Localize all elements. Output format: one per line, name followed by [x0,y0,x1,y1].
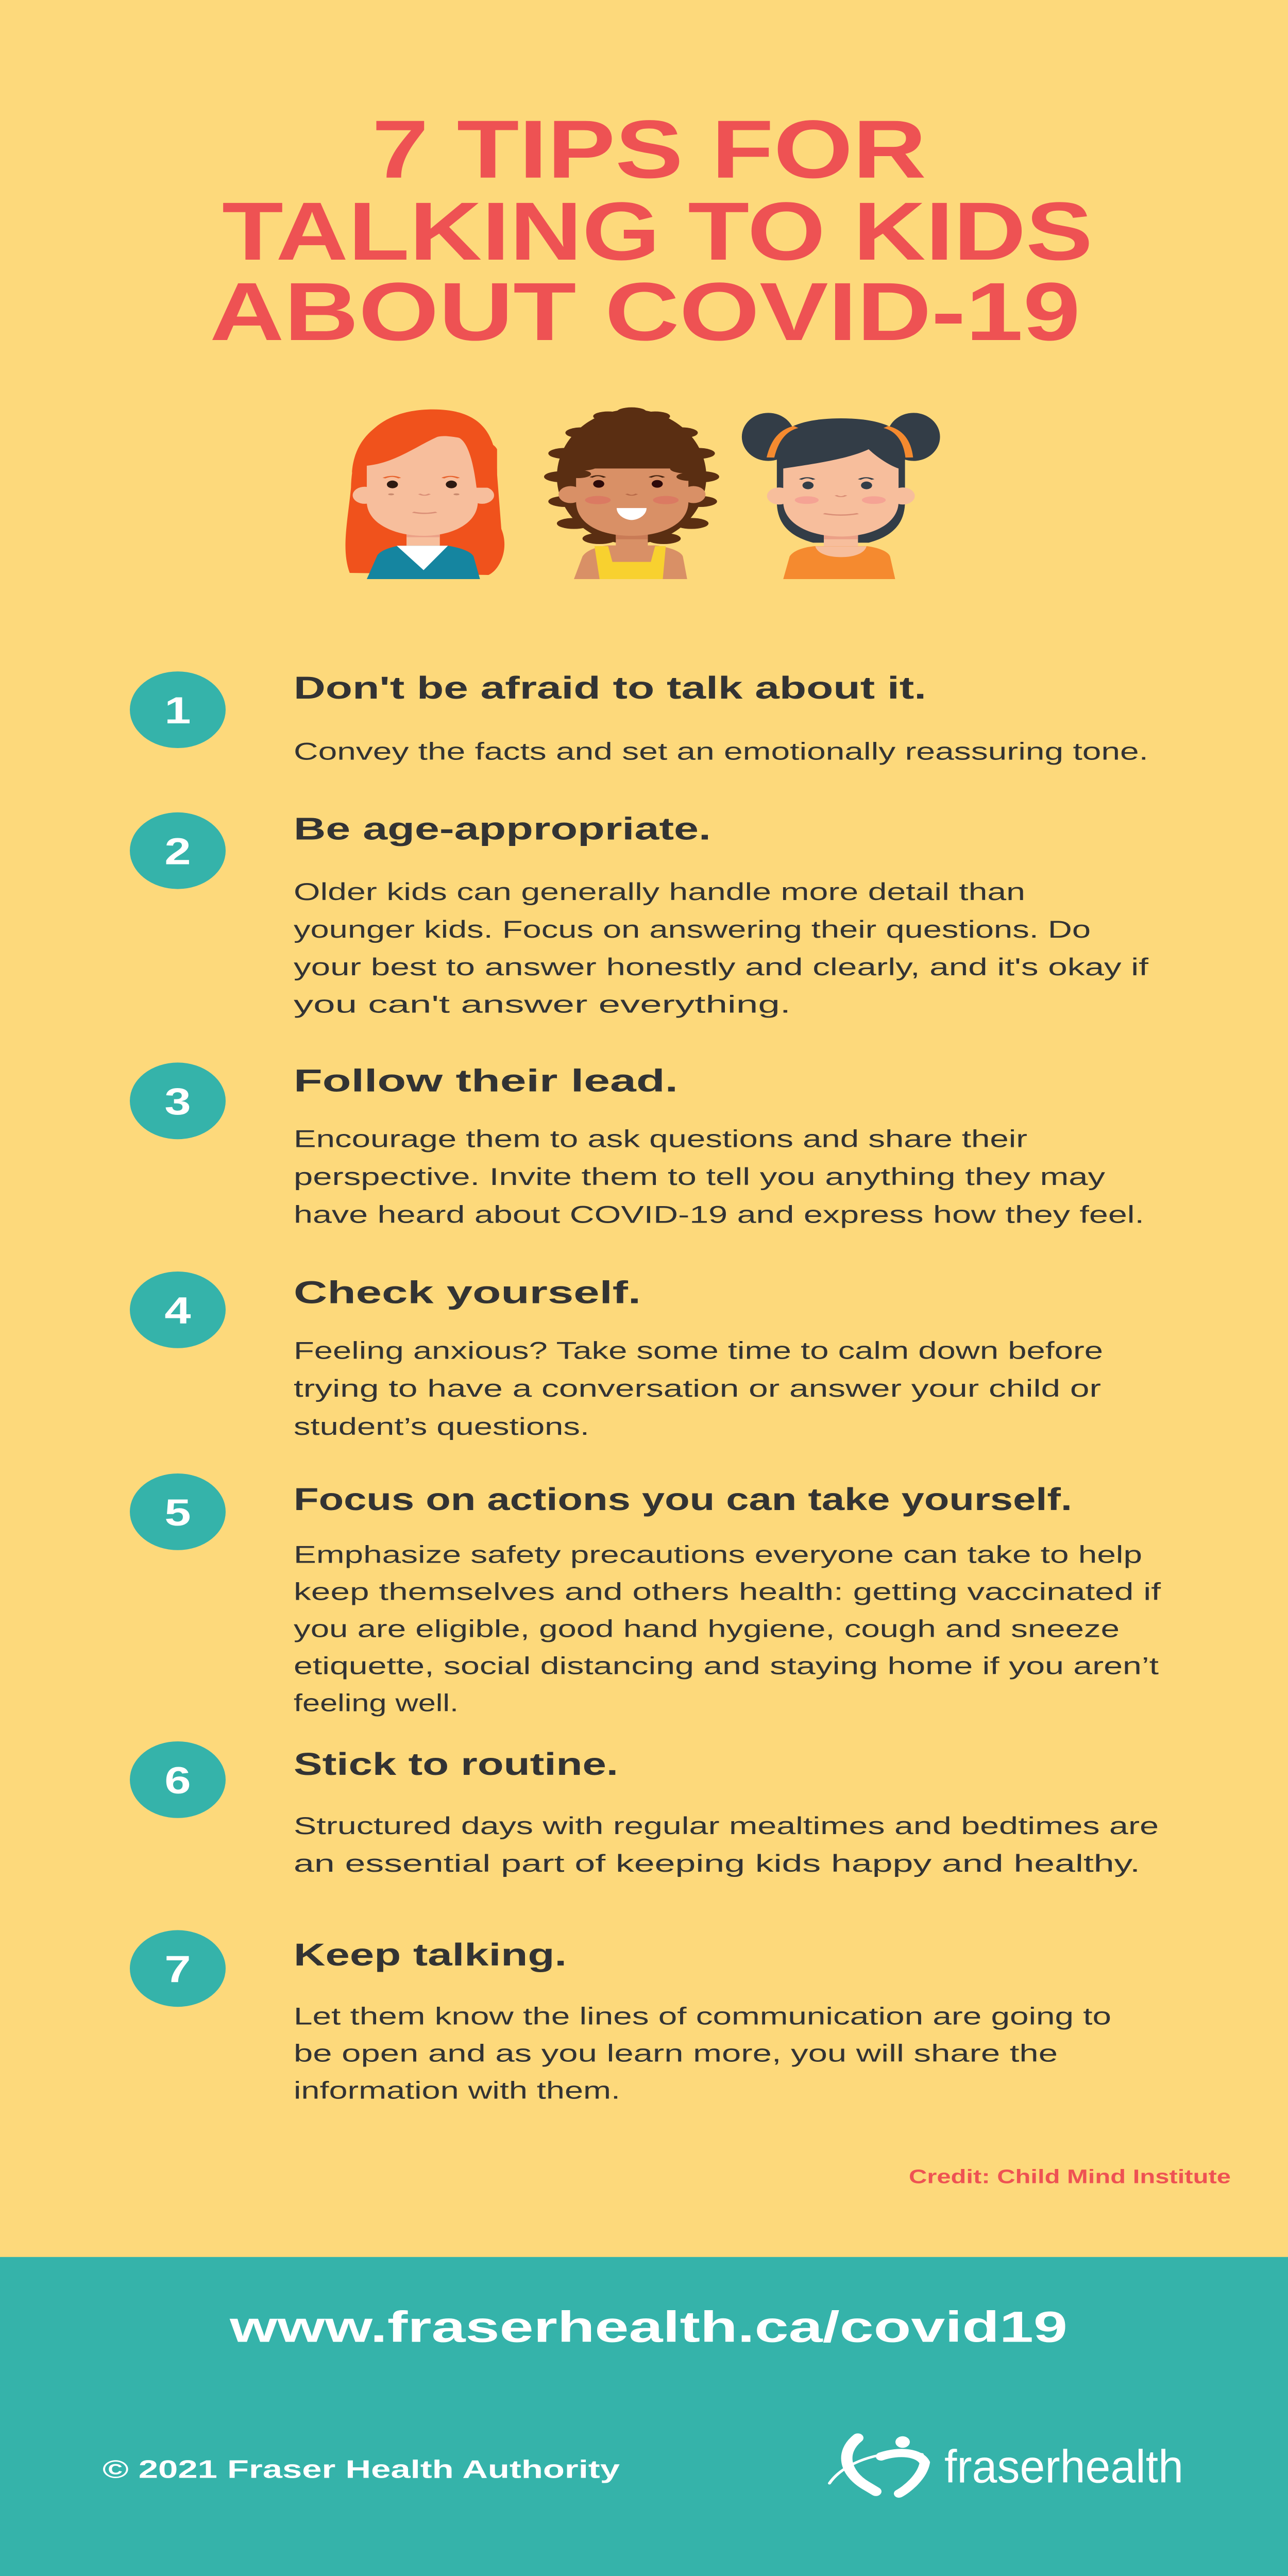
tip 5: Emphasize safety precautions everyone can take to help [294,1541,1142,1568]
kids illustration [345,407,940,579]
number circle 6: 6 [164,1759,191,1802]
title: ABOUT COVID-19 [210,266,1080,358]
tip 5: Focus on actions you can take yourself. [294,1482,1072,1517]
tip 2: you can't answer everything. [294,991,791,1018]
tip 5: you are eligible, good hand hygiene, cough and sneeze [294,1616,1120,1642]
tip 6: Stick to routine. [294,1747,618,1782]
tip 4: Feeling anxious? Take some time to calm down before [294,1337,1103,1364]
tip 2: Be age-appropriate. [294,811,711,846]
tip 2: younger kids. Focus on answering their questions. Do [294,916,1091,943]
number circle 4: 4 [164,1290,191,1332]
tip 7: information with them. [294,2077,620,2104]
tip 3 [130,1062,1144,1228]
tip 5 [130,1473,1161,1717]
tip 7: Keep talking. [294,1937,567,1972]
footer band [0,2257,1288,2576]
tip 6: Structured days with regular mealtimes and bedtimes are [294,1812,1159,1840]
number circle 3 [130,1062,226,1139]
number circle 2: 2 [164,830,191,873]
number circle 4 [130,1272,226,1348]
number circle 1 [130,671,226,748]
tip 5: keep themselves and others health: getting vaccinated if [294,1579,1161,1605]
number circle 1: 1 [164,689,191,732]
tip 4: trying to have a conversation or answer your child or [294,1376,1101,1402]
number circle 5: 5 [164,1492,191,1534]
logo: fraserhealth: fraserhealth [944,2441,1183,2493]
tip 2: your best to answer honestly and clearly, and it's okay if [294,954,1148,980]
kid 1: red hair [346,410,504,579]
number circle 5 [130,1473,226,1550]
tip 5: etiquette, social distancing and staying home if you aren’t [294,1653,1159,1680]
tip 5: feeling well. [294,1690,459,1717]
title: 7 TIPS FOR [372,104,926,195]
tip 1: Don't be afraid to talk about it. [294,670,926,705]
title: TALKING TO KIDS [222,185,1093,277]
number circle 7: 7 [164,1948,191,1990]
title [210,104,1093,358]
website url: www.fraserhealth.ca/covid19 [229,2303,1067,2351]
tip 7: Let them know the lines of communication are going to [294,2003,1111,2030]
tip 2 [130,811,1148,1018]
tip 7 [130,1930,1111,2104]
tip 6: an essential part of keeping kids happy and healthy. [294,1850,1140,1877]
tip 6 [130,1741,1159,1877]
number circle 6 [130,1741,226,1818]
logo: fraserhealth [829,2436,1183,2494]
tip 4: Check yourself. [294,1275,641,1310]
tip 1: Convey the facts and set an emotionally reassuring tone. [294,738,1148,765]
tip 3: perspective. Invite them to tell you anything they may [294,1163,1105,1191]
tip 3: Follow their lead. [294,1063,678,1098]
copyright: © 2021 Fraser Health Authority [103,2455,620,2483]
tip 2: Older kids can generally handle more detail than [294,879,1025,906]
credit: Credit: Child Mind Institute [909,2166,1231,2188]
tip 4: student’s questions. [294,1413,589,1440]
tip 7: be open and as you learn more, you will share the [294,2040,1058,2067]
number circle 3: 3 [164,1080,191,1123]
tip 4 [130,1272,1103,1440]
number circle 2 [130,812,226,889]
tip 3: Encourage them to ask questions and share their [294,1126,1027,1153]
kid 2: curly hair [544,408,719,579]
logo icon [829,2436,925,2494]
number circle 7 [130,1930,226,2007]
kid 3: buns [742,413,940,579]
tip 1 [130,670,1148,765]
tip 3: have heard about COVID-19 and express how they feel. [294,1201,1144,1228]
